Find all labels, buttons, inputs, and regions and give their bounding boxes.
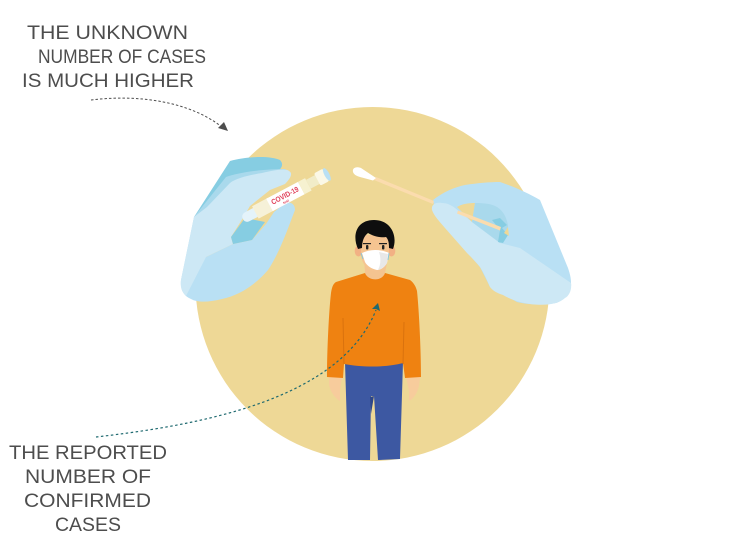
hands xyxy=(329,377,342,401)
arrow: reported cases to person xyxy=(96,303,380,437)
trousers xyxy=(345,362,403,460)
heading: unknown cases: THE UNKNOWN xyxy=(27,23,188,44)
heading: reported cases: THE REPORTED xyxy=(9,443,167,464)
heading: reported cases: NUMBER OF xyxy=(25,467,151,488)
heading: unknown cases: IS MUCH HIGHER xyxy=(22,71,194,92)
heading: unknown cases: NUMBER OF CASES xyxy=(38,47,206,68)
icon: swab xyxy=(353,167,501,230)
heading: reported cases: CONFIRMED xyxy=(24,491,151,512)
icon: vial: test xyxy=(282,198,290,205)
person xyxy=(327,220,421,460)
icon: vial: COVID-19 xyxy=(270,185,300,207)
hair xyxy=(355,220,395,249)
icon: left gloved hand holding vial xyxy=(181,157,332,302)
arrow: unknown cases to circle xyxy=(91,98,228,131)
heading: reported cases: CASES xyxy=(55,515,121,536)
neck xyxy=(364,258,388,280)
heading: unknown cases xyxy=(22,23,206,92)
eyes xyxy=(363,243,387,250)
background circle xyxy=(196,107,550,461)
mask xyxy=(362,250,389,270)
icon: vial xyxy=(240,167,332,225)
heading: reported cases xyxy=(9,443,167,536)
icon: right gloved hand holding swab xyxy=(353,167,571,305)
ears xyxy=(355,246,362,256)
face xyxy=(361,235,389,272)
shirt xyxy=(327,273,421,378)
